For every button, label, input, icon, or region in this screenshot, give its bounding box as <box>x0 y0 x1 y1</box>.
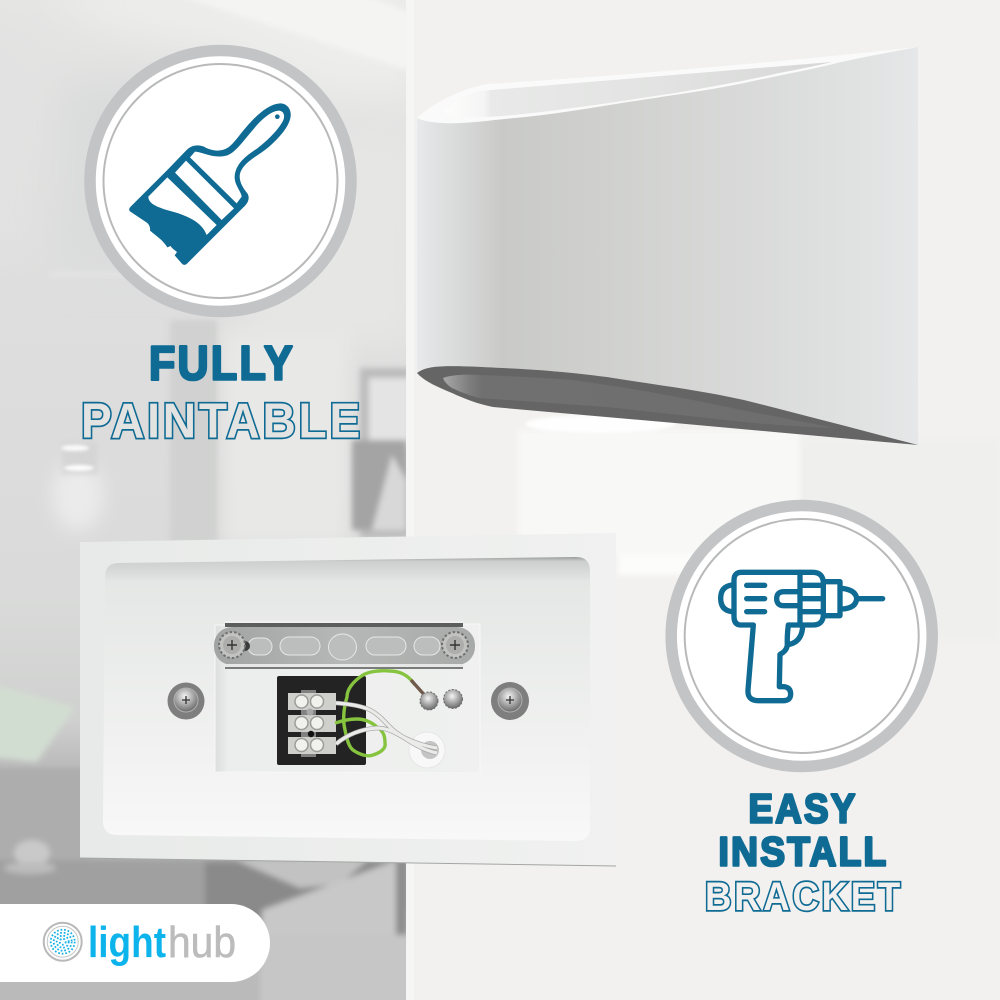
icon badge: drill <box>671 506 932 766</box>
lamp top rim <box>417 47 918 123</box>
side screw left <box>168 682 204 720</box>
metal bracket <box>214 621 475 669</box>
bracket screw left <box>219 632 250 658</box>
logo wordmark: hub <box>168 918 236 967</box>
background: blurred room, left panel <box>0 0 420 1000</box>
logo badge: lighthub <box>0 904 270 982</box>
heading: fully paintable <box>81 338 363 448</box>
green earth wire <box>335 671 415 756</box>
heading: easy install bracket: BRACKET <box>705 875 903 919</box>
heading: fully paintable: FULLY <box>149 338 295 390</box>
background: pale room, right panel <box>406 0 1000 1000</box>
inner wiring cavity <box>215 624 480 773</box>
lamp top recess <box>445 62 832 117</box>
lamp underside recess <box>443 375 834 428</box>
heading: easy install bracket <box>705 786 903 919</box>
white mains wires <box>336 703 437 753</box>
logo wordmark: light <box>88 918 166 967</box>
grommet <box>409 732 445 768</box>
terminal block <box>277 676 366 765</box>
heading: easy install bracket: INSTALL <box>718 828 888 874</box>
logo icon <box>44 923 82 961</box>
side screw right <box>491 682 529 720</box>
panel: backplate with wiring <box>80 533 616 866</box>
icon: paint brush <box>129 103 291 265</box>
earth lug <box>411 680 428 699</box>
icon: drill <box>721 572 883 701</box>
product photo: white wall light <box>417 47 918 445</box>
plate recess <box>103 557 590 841</box>
icon badge: paint brush <box>90 50 351 312</box>
lamp underside <box>417 366 918 445</box>
bracket screw right <box>442 632 468 658</box>
heading: fully paintable: PAINTABLE <box>81 394 363 448</box>
earth screws <box>420 690 462 710</box>
logo wordmark <box>88 918 236 967</box>
heading: easy install bracket: EASY <box>748 786 858 832</box>
